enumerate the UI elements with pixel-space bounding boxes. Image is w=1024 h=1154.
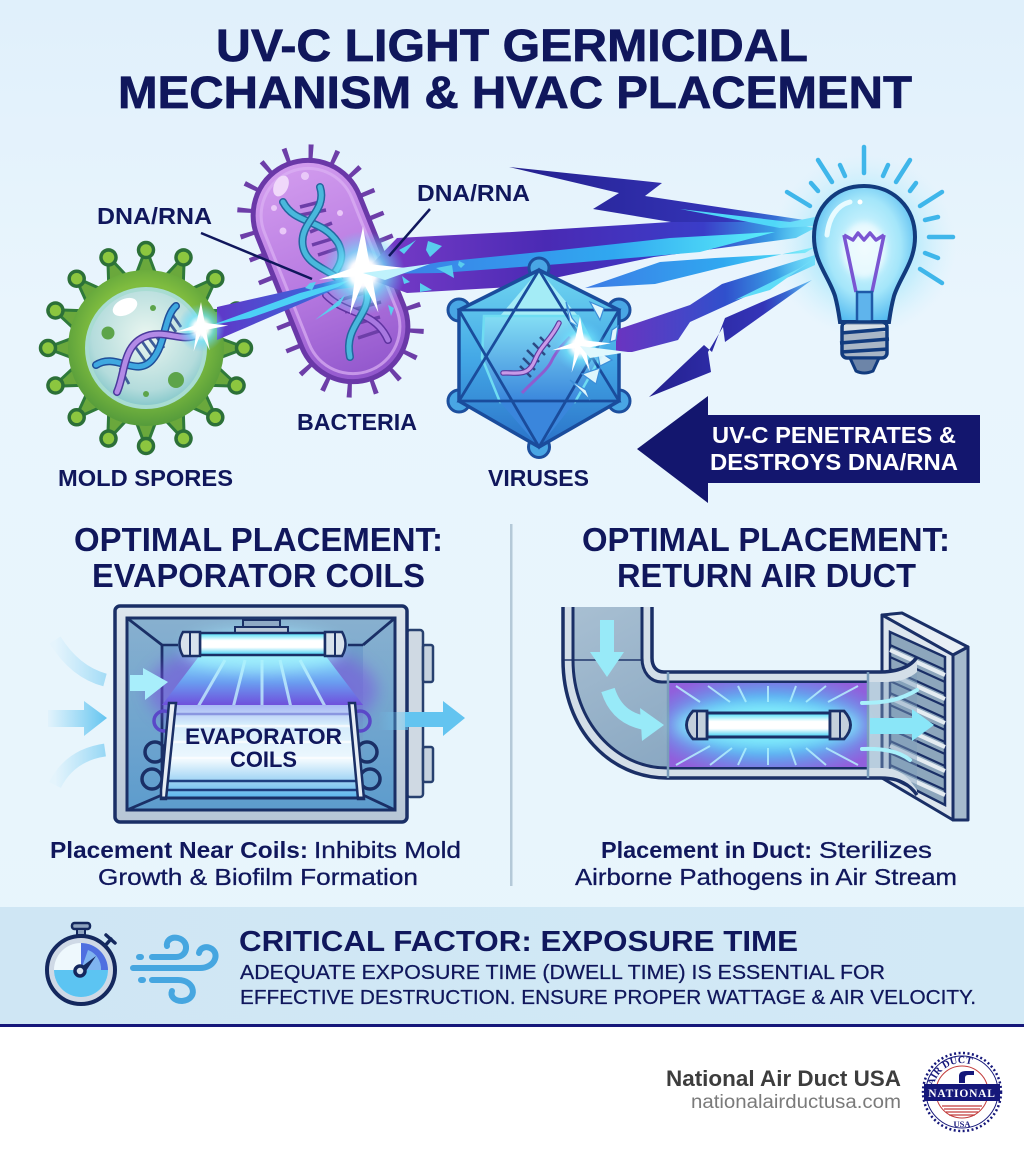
logo: National Air Duct USA seal	[922, 1052, 1002, 1132]
shards	[305, 240, 465, 320]
footer brand text: nationalairductusa.com	[691, 1092, 901, 1113]
label: DNA/RNA right with pointer: DNA/RNA	[417, 180, 530, 206]
diagram: return air duct	[563, 607, 968, 820]
label: DNA/RNA left with pointer: DNA/RNA	[97, 203, 212, 229]
heading: return air duct: OPTIMAL PLACEMENT:	[582, 521, 950, 558]
airflow in	[55, 640, 105, 680]
label: bacteria: BACTERIA	[297, 409, 417, 435]
mount and UV lamp	[243, 620, 280, 627]
caption: placement near coils	[50, 837, 461, 890]
heading: evaporator coils: OPTIMAL PLACEMENT:	[74, 521, 443, 558]
logo: National Air Duct USA seal: NATIONAL	[928, 1088, 996, 1100]
heading: critical factor: CRITICAL FACTOR: EXPOSURE TIME	[239, 926, 798, 958]
panel: critical factor band	[0, 907, 1024, 1027]
label: mold spores: MOLD SPORES	[58, 465, 233, 491]
coil tube bends	[142, 711, 380, 789]
side panel	[407, 630, 423, 797]
label: DNA/RNA right with pointer	[389, 180, 530, 256]
impact bursts	[176, 227, 628, 373]
heading: return air duct: RETURN AIR DUCT	[617, 557, 916, 594]
top lightning bolt	[509, 167, 818, 222]
logo: National Air Duct USA seal: AIR DUCT	[928, 1056, 973, 1084]
caption: placement in duct: Sterilizes	[819, 837, 932, 863]
coil label: EVAPORATOR	[185, 724, 342, 749]
light beams from bulb	[212, 167, 820, 397]
icon: virus	[448, 258, 630, 458]
text: exposure description	[240, 961, 976, 1009]
diagram: evaporator coil cabinet: COILS	[230, 747, 297, 772]
main beam	[368, 222, 815, 293]
caption: placement in duct: Airborne Pathogens in Air Stream	[575, 864, 957, 890]
icon: UV-C light bulb	[772, 147, 956, 373]
callout arrow: UV-C penetrates: UV-C PENETRATES &	[712, 422, 956, 448]
UV window	[668, 683, 868, 767]
UV lamp	[707, 713, 830, 737]
caption: placement near coils: Placement Near Coils:	[50, 837, 308, 863]
footer brand text	[666, 1066, 901, 1113]
text: exposure description: ADEQUATE EXPOSURE TIME (DWELL TIME) IS ESSENTIAL FOR	[240, 961, 885, 984]
icon: bacteria	[226, 133, 435, 409]
caption: placement in duct	[575, 837, 957, 890]
title: MECHANISM & HVAC PLACEMENT	[118, 67, 912, 118]
airflow arrows	[130, 668, 168, 700]
label: viruses: VIRUSES	[488, 465, 589, 491]
callout arrow: UV-C penetrates: DESTROYS DNA/RNA	[710, 449, 958, 475]
title: UV-C LIGHT GERMICIDAL	[216, 20, 808, 71]
caption: placement near coils: Growth & Biofilm Formation	[98, 864, 418, 890]
logo: National Air Duct USA seal: USA	[953, 1119, 971, 1129]
beam to mold	[217, 275, 366, 340]
grille	[882, 613, 968, 655]
icon: wind	[133, 938, 216, 1001]
heading: evaporator coils: EVAPORATOR COILS	[92, 557, 425, 594]
title	[118, 20, 912, 118]
heading: evaporator coils	[74, 521, 443, 594]
icon: stopwatch	[47, 923, 115, 1004]
diagram: evaporator coil cabinet	[48, 606, 465, 822]
airflow arrows	[590, 620, 624, 677]
heading: return air duct	[582, 521, 950, 594]
text: exposure description: EFFECTIVE DESTRUCTION. ENSURE PROPER WATTAGE & AIR VELOCITY.	[240, 986, 976, 1009]
flared duct mouth	[868, 672, 917, 790]
label: DNA/RNA left with pointer	[97, 203, 312, 279]
duct body	[563, 607, 868, 778]
footer brand text: National Air Duct USA	[666, 1066, 901, 1091]
lower lightning bolt	[649, 280, 812, 397]
divider	[510, 524, 512, 886]
icon: mold spore	[40, 242, 252, 454]
beam into virus	[566, 255, 815, 400]
callout arrow: UV-C penetrates	[637, 396, 980, 503]
caption: placement near coils: Inhibits Mold	[314, 837, 461, 863]
caption: placement in duct: Placement in Duct:	[601, 837, 812, 863]
